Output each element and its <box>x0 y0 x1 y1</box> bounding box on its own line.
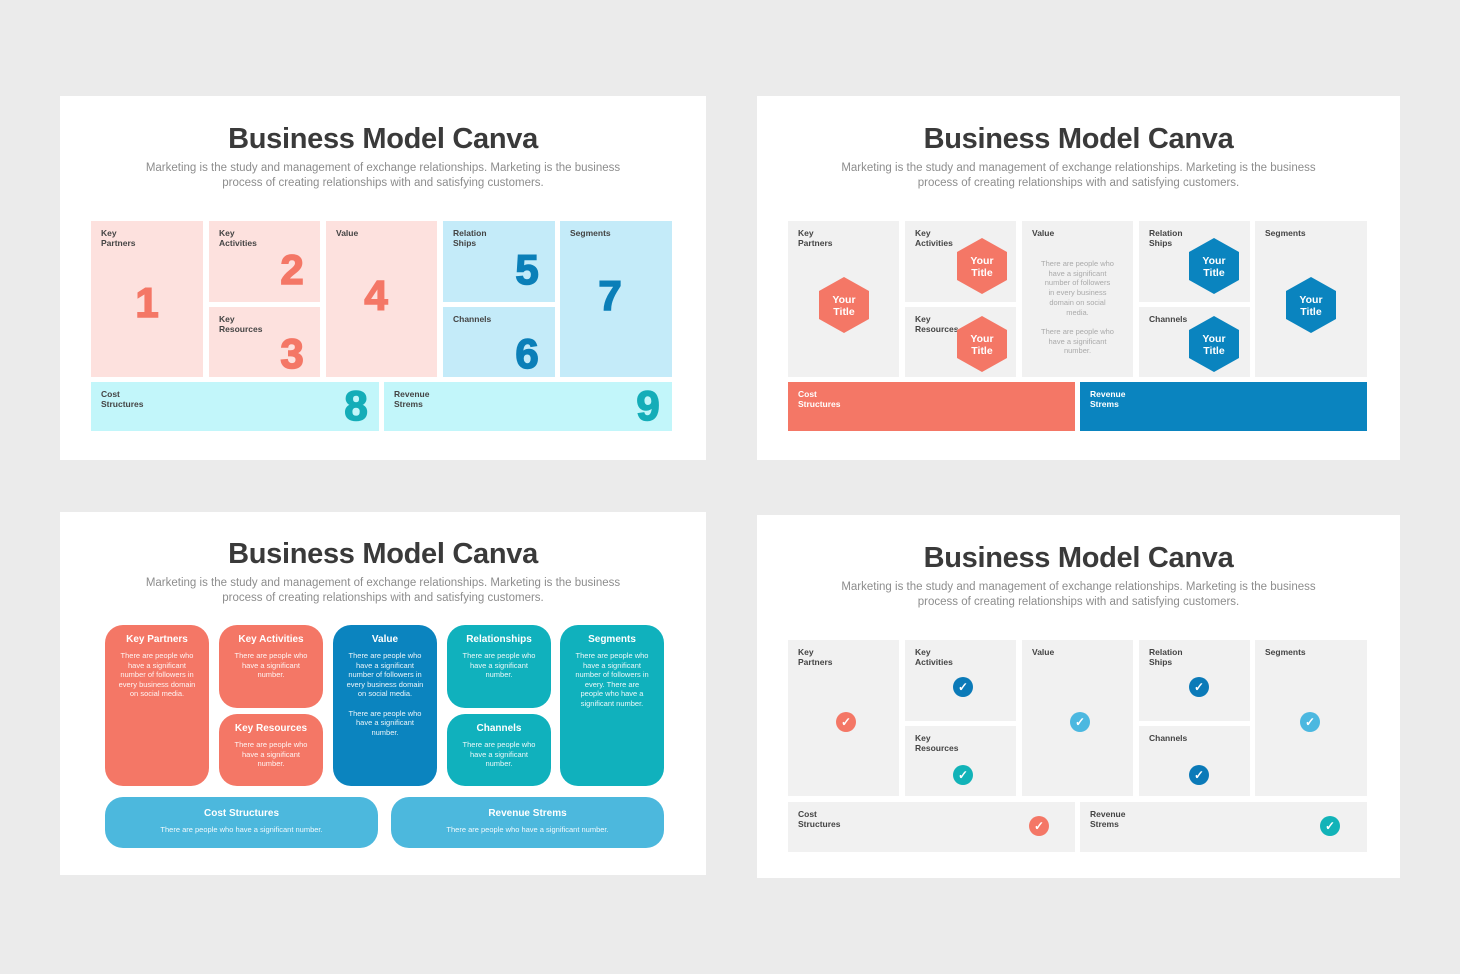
cell: key activities <box>209 221 320 302</box>
card: revenue streams: There are people who have a significant number. <box>446 825 609 834</box>
cell: value: media. <box>1066 308 1089 317</box>
card: cost structures: There are people who have a significant number. <box>160 825 323 834</box>
cell: value: number of followers <box>1045 278 1110 287</box>
card: key partners: Key Partners <box>126 634 188 645</box>
cell: value: have a significant <box>1049 269 1106 278</box>
cell: cost structures <box>91 382 379 431</box>
card: relationships: Relationships <box>466 634 532 645</box>
cell: key activities: Activities <box>219 238 257 248</box>
cell: value: Value <box>336 228 358 238</box>
card: segments <box>560 625 664 786</box>
cell: value: number. <box>1064 346 1091 355</box>
icon: check value <box>1070 712 1090 732</box>
number 7: 7 <box>598 272 622 319</box>
card: key resources <box>219 714 323 786</box>
cell: key activities: Key <box>915 647 931 657</box>
cell: channels: Channels <box>1149 733 1187 743</box>
card: revenue streams: Revenue Strems <box>488 808 567 819</box>
hexagon: key partners: Your <box>832 294 856 306</box>
cell: key partners: Partners <box>798 238 832 248</box>
subtitle <box>146 577 620 604</box>
icon: check relationships: ✓ <box>1194 680 1204 694</box>
subtitle: Marketing is the study and management of exchange relationships. Marketing is the business <box>841 162 1316 174</box>
subtitle <box>841 581 1316 608</box>
cell: value: There are people who <box>1041 327 1114 336</box>
title: Business Model Canva <box>924 542 1233 574</box>
cell: key partners: Key <box>101 228 117 238</box>
cell: revenue streams: Strems <box>1090 818 1119 828</box>
icon: check relationships <box>1189 677 1209 697</box>
hexagon: key resources <box>957 316 1007 372</box>
cell: relationships: Ships <box>1149 238 1172 248</box>
number 8: 8 <box>344 382 368 429</box>
cell: channels: Channels <box>453 314 491 324</box>
cell: value <box>1022 221 1133 377</box>
cell: revenue streams: Revenue <box>1090 809 1125 819</box>
icon: check key partners <box>836 712 856 732</box>
panel: numbered canvas <box>60 96 706 460</box>
cell: cost structures: Structures <box>101 398 144 408</box>
cell: revenue streams: Strems <box>394 398 423 408</box>
number 6: 6 <box>515 330 539 377</box>
cell: revenue streams: Revenue <box>394 389 429 399</box>
icon: check revenue <box>1320 816 1340 836</box>
cell: value: Value <box>1032 647 1054 657</box>
cell: value <box>1022 640 1133 796</box>
cell: cost structures <box>788 802 1075 852</box>
cell: cost structures: Cost <box>798 389 817 399</box>
cell: key partners <box>788 221 899 377</box>
number 3: 3 <box>280 330 304 377</box>
cell: key partners: Partners <box>101 238 136 248</box>
cell: relationships <box>443 221 555 302</box>
hexagon: segments <box>1286 277 1336 333</box>
hexagon: relationships <box>1189 238 1239 294</box>
cell: key resources <box>905 726 1016 796</box>
subtitle: process of creating relationships with and satisfying customers. <box>918 596 1239 608</box>
cell: relationships <box>1139 640 1250 721</box>
card: value: Value <box>372 634 398 645</box>
cell: key activities <box>905 221 1016 302</box>
card: key resources: There are people who have a significant number. <box>235 740 307 768</box>
cell: key resources <box>209 307 320 377</box>
cell: key activities: Key <box>219 228 235 238</box>
card: channels <box>447 714 551 786</box>
icon: check channels: ✓ <box>1194 768 1204 782</box>
cell: relationships: Relation <box>1149 647 1183 657</box>
card: key partners <box>105 625 209 786</box>
icon: check key partners: ✓ <box>841 715 851 729</box>
card: relationships: There are people who have a significant number. <box>463 651 535 679</box>
hexagon: channels: Your <box>1202 333 1226 345</box>
number 1: 1 <box>135 279 159 326</box>
icon: check key activities: ✓ <box>958 680 968 694</box>
number 2: 2 <box>280 246 304 293</box>
subtitle: process of creating relationships with and satisfying customers. <box>222 592 544 604</box>
cell: key resources: Key <box>915 733 931 743</box>
cell: value: domain on social <box>1049 298 1106 307</box>
cell: channels <box>443 307 555 377</box>
subtitle <box>841 162 1316 189</box>
cell: segments <box>1255 640 1367 796</box>
cell: channels <box>1139 307 1250 377</box>
icon: check key resources <box>953 765 973 785</box>
card: key activities: There are people who have a significant number. <box>235 651 307 679</box>
cell: key resources: Resources <box>915 742 958 752</box>
icon: check segments: ✓ <box>1305 715 1315 729</box>
cell: segments <box>1255 221 1367 377</box>
cell: value <box>326 221 437 377</box>
card: key resources: Key Resources <box>235 723 307 734</box>
cell: key partners <box>788 640 899 796</box>
cell: value: have a significant <box>1049 337 1106 346</box>
subtitle: process of creating relationships with and satisfying customers. <box>222 177 544 189</box>
icon: check key resources: ✓ <box>958 768 968 782</box>
panel: checkmark canvas <box>757 515 1400 878</box>
panel: rounded cards canvas <box>60 512 706 875</box>
cell: key partners <box>91 221 203 377</box>
cell: key resources <box>905 307 1016 377</box>
cell: key activities: Key <box>915 228 931 238</box>
hexagon: relationships: Title <box>1203 267 1225 279</box>
number 4: 4 <box>364 272 388 319</box>
card: value: There are people who have a significant number of followers in every business domain on social media. <box>347 651 423 698</box>
card: cost structures <box>105 797 378 848</box>
icon: check channels <box>1189 765 1209 785</box>
cell: cost structures: Structures <box>798 818 841 828</box>
icon: check value: ✓ <box>1075 715 1085 729</box>
cell: segments: Segments <box>1265 647 1306 657</box>
title: Business Model Canva <box>228 123 538 155</box>
subtitle: process of creating relationships with and satisfying customers. <box>918 177 1239 189</box>
card: key activities <box>219 625 323 708</box>
cell: value: in every business <box>1049 288 1106 297</box>
subtitle: Marketing is the study and management of exchange relationships. Marketing is the business <box>146 577 620 589</box>
hexagon: key activities: Title <box>971 267 993 279</box>
cell: value: There are people who <box>1041 259 1114 268</box>
title: Business Model Canva <box>924 123 1233 155</box>
hexagon: key partners: Title <box>833 306 855 318</box>
cell: cost structures: Cost <box>798 809 817 819</box>
subtitle: Marketing is the study and management of exchange relationships. Marketing is the business <box>841 581 1316 593</box>
cell: key partners: Key <box>798 647 814 657</box>
cell: revenue streams <box>1080 802 1367 852</box>
icon: check revenue: ✓ <box>1325 819 1335 833</box>
hexagon: channels: Title <box>1203 345 1225 357</box>
cell: key resources: Resources <box>219 324 262 334</box>
card: segments: There are people who have a significant number of followers in every. There are people who have a significant number. <box>575 651 649 708</box>
hexagon: key activities: Your <box>970 255 994 267</box>
panel: hexagon canvas <box>757 96 1400 460</box>
number 9: 9 <box>636 382 660 429</box>
card: value <box>333 625 437 786</box>
card: key activities: Key Activities <box>238 634 304 645</box>
subtitle <box>146 162 620 189</box>
card: relationships <box>447 625 551 708</box>
cell: key activities: Activities <box>915 656 953 666</box>
card: value: There are people who have a significant number. <box>349 709 421 737</box>
cell: cost structures: Structures <box>798 398 841 408</box>
cell: relationships: Ships <box>1149 656 1172 666</box>
cell: relationships: Relation <box>1149 228 1183 238</box>
hexagon: key partners <box>819 277 869 333</box>
hexagon: segments: Title <box>1300 306 1322 318</box>
cell: segments: Segments <box>1265 228 1306 238</box>
hexagon: key resources: Your <box>970 333 994 345</box>
icon: check key activities <box>953 677 973 697</box>
cell: key activities: Activities <box>915 238 953 248</box>
subtitle: Marketing is the study and management of exchange relationships. Marketing is the business <box>146 162 620 174</box>
cell: revenue streams <box>384 382 672 431</box>
cell: segments <box>560 221 672 377</box>
hexagon: key activities <box>957 238 1007 294</box>
cell: key partners: Key <box>798 228 814 238</box>
hexagon: segments: Your <box>1299 294 1323 306</box>
cell: channels <box>1139 726 1250 796</box>
cell: key resources: Key <box>915 314 931 324</box>
card: cost structures: Cost Structures <box>204 808 279 819</box>
card: key partners: There are people who have a significant number of followers in every business domain on social media. <box>119 651 195 698</box>
card: revenue streams <box>391 797 664 848</box>
icon: check cost <box>1029 816 1049 836</box>
card: segments: Segments <box>588 634 636 645</box>
cell: relationships: Ships <box>453 238 476 248</box>
cell: key resources: Key <box>219 314 235 324</box>
cell: value: Value <box>1032 228 1054 238</box>
cell: relationships <box>1139 221 1250 302</box>
cell: key partners: Partners <box>798 656 832 666</box>
cell: segments: Segments <box>570 228 611 238</box>
cell: cost structures: Cost <box>101 389 120 399</box>
cell: key activities <box>905 640 1016 721</box>
icon: check cost: ✓ <box>1034 819 1044 833</box>
cell: cost structures <box>788 382 1075 431</box>
cell: key resources: Resources <box>915 324 958 334</box>
title: Business Model Canva <box>228 538 538 570</box>
hexagon: channels <box>1189 316 1239 372</box>
hexagon: key resources: Title <box>971 345 993 357</box>
number 5: 5 <box>515 246 539 293</box>
hexagon: relationships: Your <box>1202 255 1226 267</box>
card: channels: There are people who have a significant number. <box>463 740 535 768</box>
cell: revenue streams: Strems <box>1090 398 1119 408</box>
cell: revenue streams <box>1080 382 1367 431</box>
cell: revenue streams: Revenue <box>1090 389 1125 399</box>
cell: channels: Channels <box>1149 314 1187 324</box>
icon: check segments <box>1300 712 1320 732</box>
cell: relationships: Relation <box>453 228 487 238</box>
card: channels: Channels <box>476 723 522 734</box>
